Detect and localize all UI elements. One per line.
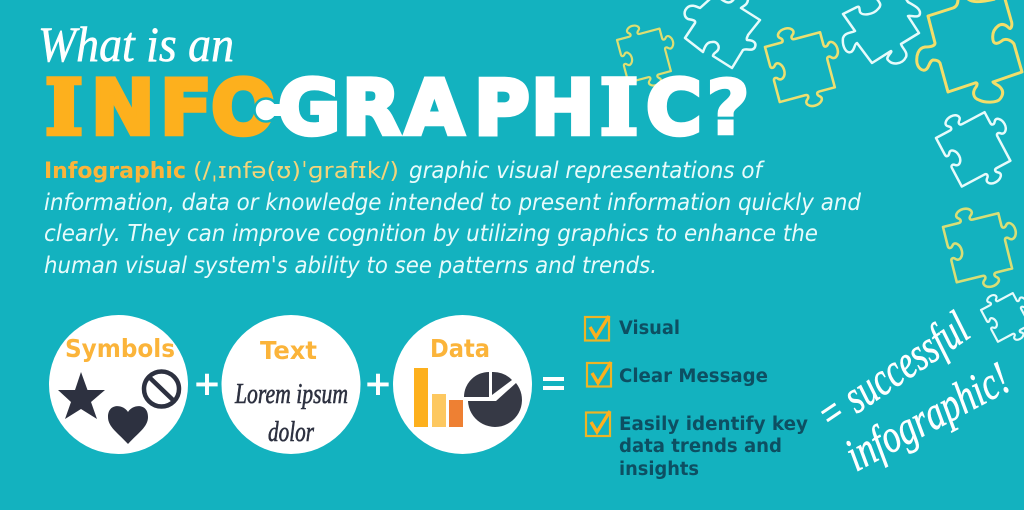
title word: GRAPHIC?: G (278, 63, 340, 152)
title (38, 16, 750, 152)
equals sign (543, 377, 564, 390)
title word: INFO: I (45, 63, 83, 152)
puzzle piece: large yellow corner (917, 0, 1022, 102)
plus sign: + (193, 364, 221, 404)
definition line 3: clearly. They can improve cognition by utilizing graphics to enhance the (44, 221, 818, 247)
check item: Clear Message (587, 362, 768, 387)
circle: data (393, 315, 532, 454)
check item: Clear Message: Clear Message (619, 366, 768, 387)
icon: star (58, 372, 105, 419)
icon: heart (108, 406, 148, 444)
script sample line 2: dolor (268, 417, 314, 448)
check item: Easily identify key data trends and insights: Easily identify key (619, 414, 808, 435)
check item: Visual (585, 316, 680, 340)
puzzle piece: small white edge (977, 282, 1024, 349)
bar chart (414, 368, 463, 427)
circle: text (222, 315, 360, 454)
circle: symbols (49, 315, 188, 454)
icon: prohibited sign (144, 372, 179, 406)
title word: GRAPHIC?: A (405, 63, 464, 152)
puzzle knob joining the title words (254, 98, 288, 122)
definition line 4: human visual system's ability to see patterns and trends. (44, 253, 657, 279)
puzzle piece: white right top (843, 0, 920, 63)
title word: INFO: N (91, 63, 155, 152)
slogan: successful infographic (807, 302, 1018, 482)
title script line: What is an (38, 16, 234, 72)
heading: Data: Data (430, 334, 490, 363)
check item: Easily identify key data trends and insights (586, 411, 808, 480)
pronunciation: (/ˌɪnfə(ʊ)ˈɡrafɪk/) (193, 159, 399, 184)
pie chart (464, 372, 522, 427)
slogan line 1: = successful (807, 302, 979, 441)
title word: GRAPHIC?: C (646, 63, 702, 152)
puzzle piece: yellow centre (762, 17, 850, 114)
puzzle pieces decoration (614, 0, 1024, 349)
heading: Symbols: Symbols (65, 334, 175, 363)
checklist (585, 316, 808, 480)
title word: GRAPHIC?: I (600, 63, 638, 152)
plus sign: + (364, 364, 392, 404)
definition line 2: information, data or knowledge intended to present information quickly and (44, 190, 861, 216)
heading: Text: Text (260, 336, 317, 365)
check item: Easily identify key data trends and insights: insights (619, 459, 699, 480)
puzzle piece: small yellow (614, 17, 683, 92)
definition term: Infographic (44, 159, 186, 184)
title word: GRAPHIC?: R (342, 63, 401, 152)
title word: INFO: F (160, 63, 212, 152)
title word: GRAPHIC?: ? (706, 63, 750, 152)
title word: INFO: O (211, 63, 276, 152)
check item: Easily identify key data trends and insights: data trends and (619, 436, 782, 457)
definition line 1: graphic visual representations of (409, 158, 765, 184)
title word: GRAPHIC?: P (474, 63, 530, 152)
definition text block (44, 158, 861, 279)
puzzle piece: white right middle (930, 96, 1024, 197)
puzzle piece: white top (685, 0, 760, 68)
title word: GRAPHIC?: H (531, 63, 595, 152)
check item: Visual: Visual (619, 318, 680, 339)
puzzle piece: yellow right lower (940, 198, 1024, 294)
script sample line 1: Lorem ipsum (234, 379, 348, 410)
